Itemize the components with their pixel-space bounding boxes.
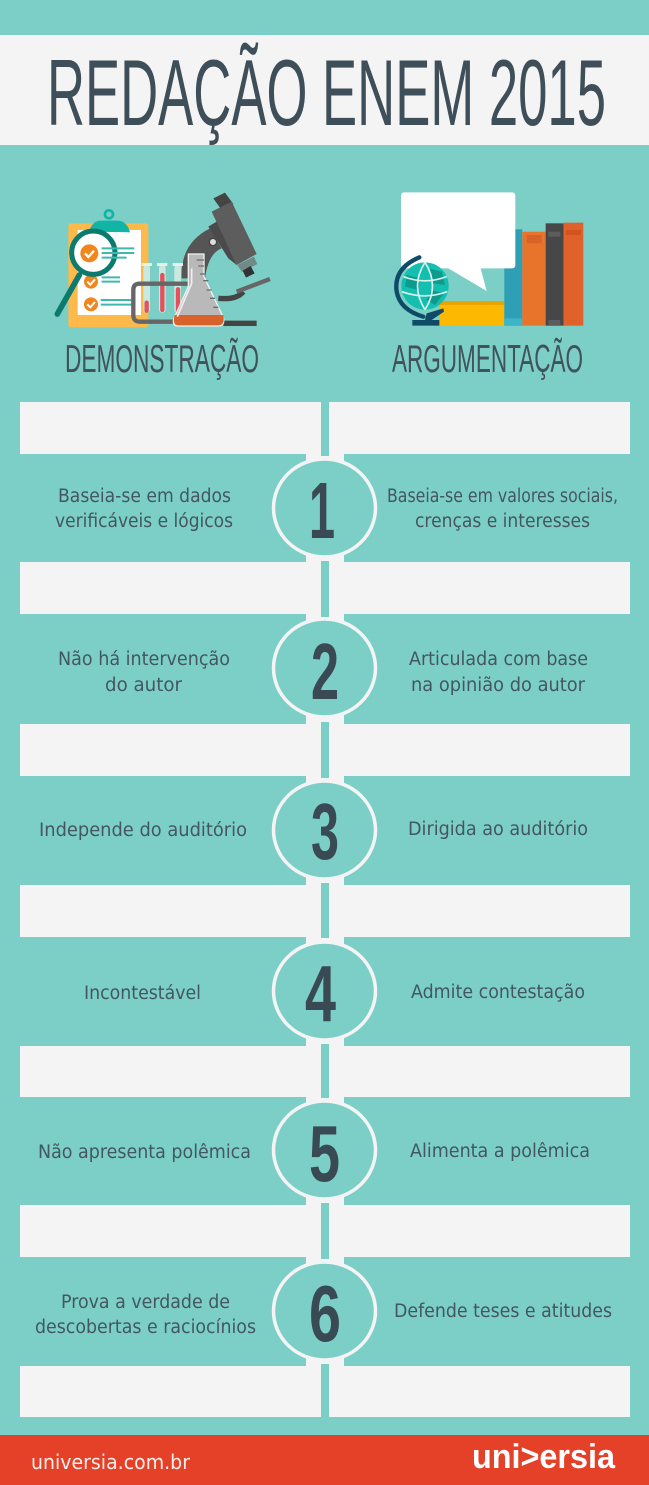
number circle 6: 6 <box>309 1269 341 1358</box>
text: argumentation 5: Alimenta a polêmica <box>410 1141 590 1162</box>
number circle 3: 3 <box>311 787 339 876</box>
text: argumentation 1: crenças e interesses <box>415 511 590 532</box>
number circle 6 <box>274 1262 376 1360</box>
text: demonstration 1: Baseia-se em dados <box>58 486 231 507</box>
number circle 1: 1 <box>309 466 335 555</box>
microscope <box>182 193 270 323</box>
text: demonstration 2: Não há intervenção <box>58 649 230 670</box>
logo: universia: uni>ersia <box>472 1438 616 1476</box>
footer band <box>0 1435 649 1485</box>
speech bubble <box>401 192 515 291</box>
footer url: universia.com.br <box>31 1450 191 1474</box>
row 5 <box>38 1101 590 1199</box>
number circle 2: 2 <box>311 627 339 716</box>
text: demonstration 5: Não apresenta polêmica <box>38 1142 251 1163</box>
number circle 3 <box>274 781 376 879</box>
books <box>440 223 583 326</box>
icon: speech bubble, globe and books <box>396 192 583 326</box>
globe <box>396 257 449 326</box>
text: demonstration 3: Independe do auditório <box>39 820 247 841</box>
text: demonstration 6 <box>35 1292 256 1338</box>
text: argumentation 1 <box>387 486 618 532</box>
text: demonstration 6: descobertas e raciocínios <box>35 1317 256 1338</box>
number circle 5 <box>274 1101 376 1199</box>
text: demonstration 2 <box>58 649 230 696</box>
row 6 <box>35 1262 612 1360</box>
center connector <box>321 402 329 1417</box>
number circle 4: 4 <box>305 949 336 1038</box>
test tubes <box>133 263 188 322</box>
clipboard <box>68 210 148 327</box>
row 3 <box>39 781 588 879</box>
icon: science lab with clipboard, magnifier, test tubes, flask and microscope <box>57 193 270 327</box>
text: argumentation 4: Admite contestação <box>411 982 585 1003</box>
text: demonstration 4: Incontestável <box>84 983 201 1004</box>
text: demonstration 6: Prova a verdade de <box>61 1292 230 1313</box>
magnifying glass <box>57 231 134 314</box>
row 4 <box>84 942 585 1040</box>
row 2 <box>58 619 588 717</box>
number circle 1 <box>274 459 376 557</box>
row 1 <box>55 459 618 557</box>
text: argumentation 2 <box>409 649 588 696</box>
number circle 2 <box>274 619 376 717</box>
text: argumentation 3: Dirigida ao auditório <box>408 819 588 840</box>
number circle 5: 5 <box>309 1109 340 1198</box>
number circle 4 <box>274 942 376 1040</box>
flask <box>173 254 224 326</box>
text: demonstration 1 <box>55 486 233 532</box>
text: argumentation 2: Articulada com base <box>409 649 588 670</box>
text: demonstration 1: verificáveis e lógicos <box>55 511 233 532</box>
text: demonstration 2: do autor <box>105 675 182 696</box>
white row bands <box>20 402 630 1417</box>
title band <box>0 35 649 145</box>
text: argumentation 6: Defende teses e atitudes <box>394 1301 612 1322</box>
text: argumentation 2: na opinião do autor <box>411 675 585 696</box>
heading: Demonstração: DEMONSTRAÇÃO <box>65 338 259 381</box>
